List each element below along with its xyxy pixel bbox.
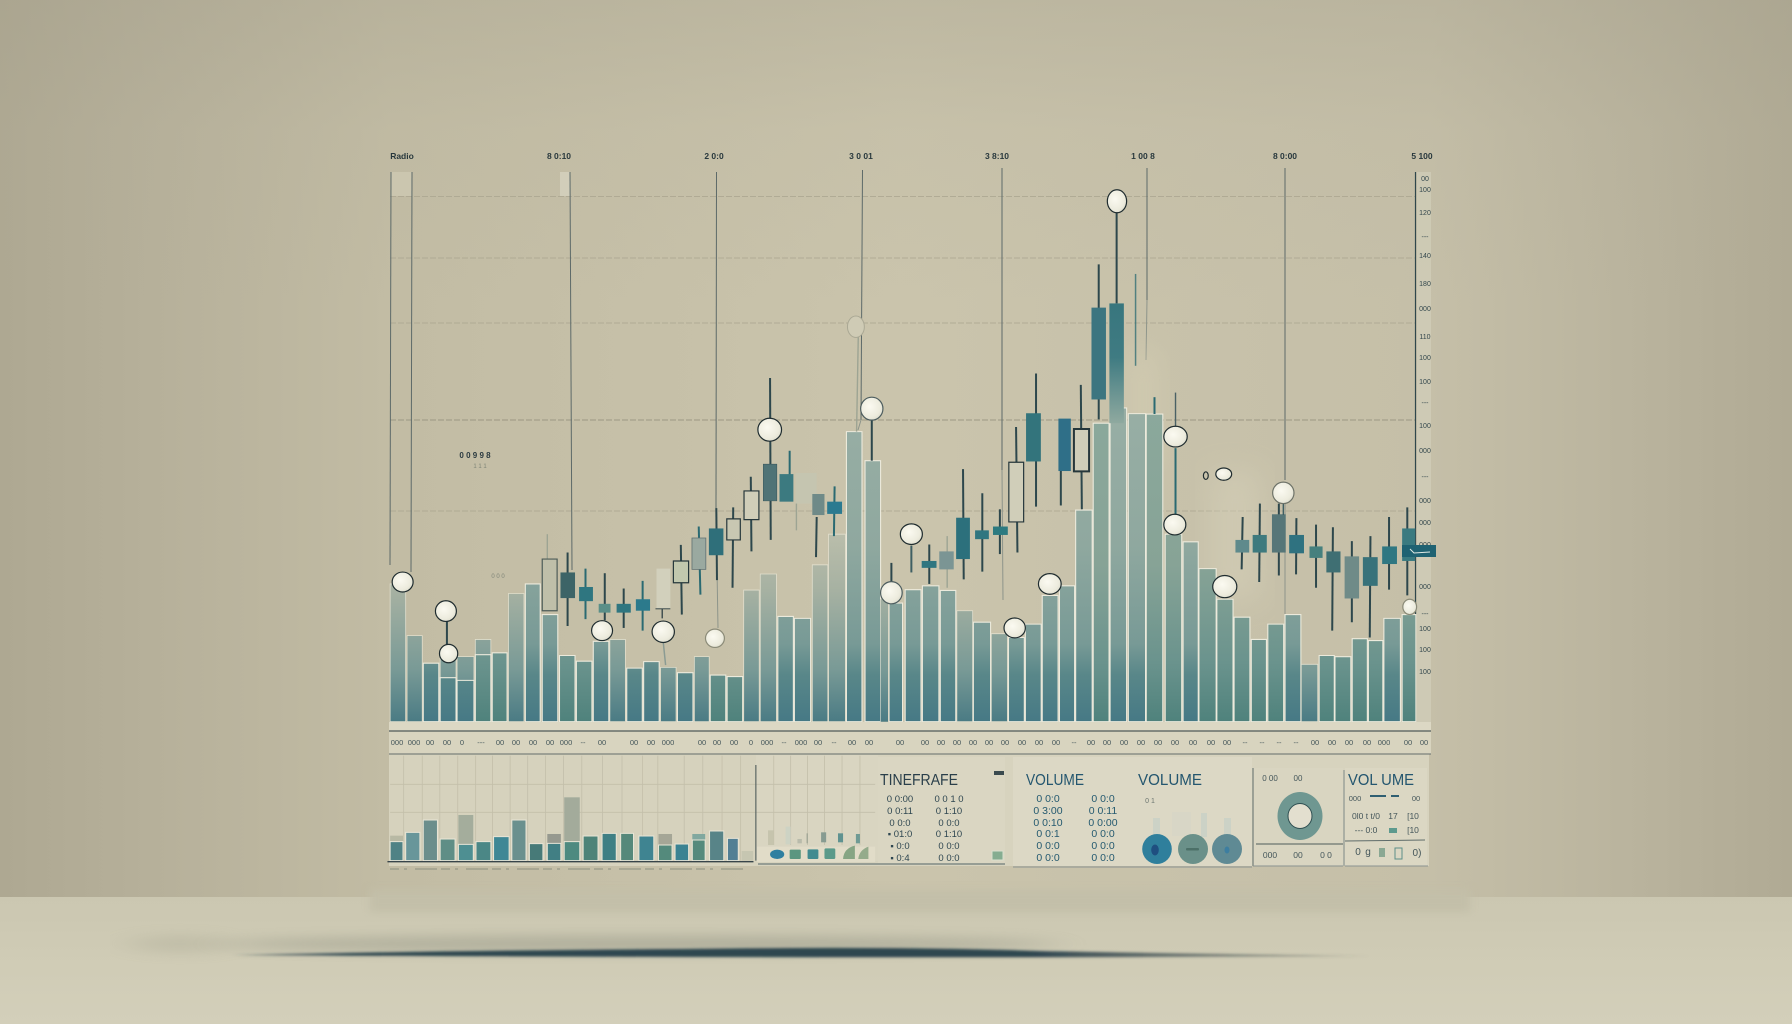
time axis strip: 00 — [512, 738, 520, 747]
time axis strip: 00 — [630, 738, 638, 747]
time axis strip: 00 — [1018, 738, 1026, 747]
main chart — [390, 151, 1436, 722]
time axis strip: 00 — [1223, 738, 1231, 747]
panel: volume table and gauges — [1013, 757, 1252, 867]
gauge dials — [1142, 834, 1242, 864]
time axis strip: 00 — [1171, 738, 1179, 747]
horizontal grid lines — [390, 196, 1415, 511]
time axis strip: 0 — [749, 738, 753, 747]
donut labels — [1262, 774, 1332, 860]
timeframe rows: 0 1:10 — [936, 806, 962, 817]
current price tag — [1402, 545, 1436, 557]
event markers — [392, 190, 1417, 665]
time axis strip: 00 — [1207, 738, 1215, 747]
time axis strip: 00 — [1087, 738, 1095, 747]
heading: timeframe: TINEFRAFE — [880, 772, 958, 789]
volume rows: 0 0:0 — [1091, 852, 1115, 864]
heading: volume right: VOLUME — [1138, 772, 1202, 789]
right price axis: 000 — [1419, 306, 1431, 313]
summary rows: [10 — [1407, 825, 1419, 835]
floating note: 1 1 1 — [473, 464, 487, 470]
time axis strip: 00 — [1363, 738, 1371, 747]
green status box — [992, 851, 1003, 860]
top time labels: 3 0 01 — [849, 151, 873, 161]
timeframe rows: 0 0:0 — [938, 853, 960, 864]
time axis strip: 00 — [1420, 738, 1428, 747]
summary rows: 00 — [1412, 794, 1420, 803]
floating note — [459, 451, 505, 580]
colour pills — [757, 846, 875, 862]
right price axis: 100 — [1419, 626, 1431, 633]
right price axis: 100 — [1419, 647, 1431, 654]
right price axis — [1416, 172, 1431, 722]
timeframe rows: 0 0 1 0 — [934, 794, 964, 805]
volume rows: 0 0:0 — [1091, 840, 1115, 852]
right price axis: 180 — [1419, 281, 1431, 288]
volume rows: 0 0:0 — [1036, 840, 1060, 852]
time axis strip: 00 — [546, 738, 554, 747]
right price axis: 100 — [1419, 379, 1431, 386]
footer tick strip — [390, 868, 745, 870]
volume rows: 0 0:1 — [1036, 828, 1060, 840]
summary rows: 17 — [1388, 811, 1398, 821]
time axis strip: 00 — [698, 738, 706, 747]
time axis strip: -- — [1294, 738, 1299, 747]
heading: volume summary: VOL UME — [1348, 772, 1414, 789]
volume rows: 0 0:0 — [1036, 793, 1060, 805]
donut labels: 000 — [1263, 850, 1277, 860]
tab icon — [994, 771, 1004, 775]
right price axis: 110 — [1419, 334, 1431, 341]
floating note: 0 0 9 9 8 — [459, 451, 491, 460]
summary icons: 0) — [1413, 848, 1421, 859]
time axis strip: 00 — [1001, 738, 1009, 747]
time axis strip: -- — [1276, 738, 1282, 747]
time axis strip: -- — [782, 738, 787, 747]
summary icons — [1355, 847, 1421, 859]
time axis strip: 00 — [1137, 738, 1145, 747]
timeframe rows: 0 0:00 — [887, 794, 913, 805]
right price axis: 000 — [1419, 542, 1431, 549]
time axis strip: -- — [1242, 738, 1248, 747]
vertical time lines — [390, 168, 1285, 630]
volume rows: 0 0:10 — [1033, 817, 1063, 829]
summary rows: 0l0 t t/0 — [1352, 811, 1380, 821]
time axis strip: 00 — [1154, 738, 1162, 747]
summary rows: --- 0:0 — [1355, 825, 1378, 835]
right price axis: 000 — [1419, 498, 1431, 505]
volume rows — [1033, 793, 1118, 864]
time axis strip: 00 — [426, 738, 434, 747]
panel: donut summary — [1253, 768, 1343, 866]
time axis strip: 0 — [460, 738, 464, 747]
small caption: 0 1 — [1145, 798, 1155, 805]
volume bars — [390, 408, 1416, 722]
time axis strip: 00 — [1189, 738, 1197, 747]
mini volume bars — [387, 797, 753, 862]
right price axis: 100 — [1419, 187, 1431, 194]
right price axis: 000 — [1419, 448, 1431, 455]
right price axis: 100 — [1419, 355, 1431, 362]
mini pale bars — [768, 827, 860, 845]
timeframe rows: 0 0:0 — [938, 841, 960, 852]
time axis strip: 00 — [953, 738, 961, 747]
volume rows: 0 0:0 — [1036, 852, 1060, 864]
floating note: 0 0 0 — [491, 574, 505, 580]
timeframe rows: ▪ 0:0 — [890, 841, 910, 852]
time axis strip: 00 — [443, 738, 451, 747]
timeframe rows: ▪ 01:0 — [888, 829, 912, 840]
top time labels: 2 0:0 — [704, 151, 724, 161]
time axis strip: 00 — [1035, 738, 1043, 747]
time axis strip: -- — [1072, 738, 1077, 747]
top time labels — [390, 151, 1433, 161]
mini chart grid — [390, 756, 875, 861]
time axis strip: 00 — [969, 738, 977, 747]
floor shadow — [130, 935, 1371, 957]
timeframe rows: 0 0:0 — [938, 818, 960, 829]
right price axis: --- — [1422, 474, 1429, 481]
top time labels: Radio — [390, 151, 414, 161]
summary rows: [10 — [1407, 811, 1419, 821]
donut labels: 00 — [1294, 774, 1303, 783]
volume rows: 0 3:00 — [1033, 805, 1063, 817]
timeframe rows — [887, 794, 964, 864]
donut labels: 0 00 — [1262, 774, 1278, 783]
time axis strip: 00 — [529, 738, 537, 747]
time axis strip: 00 — [1345, 738, 1353, 747]
right price axis: --- — [1422, 400, 1429, 407]
floor — [0, 897, 1792, 1024]
time axis strip: -- — [580, 738, 586, 747]
time axis strip: 00 — [921, 738, 929, 747]
right price axis: 100 — [1419, 423, 1431, 430]
time axis strip: 000 — [1378, 738, 1390, 747]
time axis strip: 00 — [496, 738, 504, 747]
time axis strip: 00 — [598, 738, 606, 747]
volume rows: 0 0:11 — [1089, 805, 1117, 817]
time axis strip: 00 — [1328, 738, 1336, 747]
timeframe rows: ▪ 0:4 — [890, 853, 910, 864]
donut labels: 0 0 — [1320, 850, 1332, 860]
summary rows: 000 — [1349, 794, 1361, 803]
soft haze around the tallest bars — [1125, 350, 1260, 600]
time axis strip: 00 — [730, 738, 738, 747]
volume rows: 0 0:0 — [1091, 828, 1115, 840]
right price axis: 000 — [1419, 584, 1431, 591]
right price axis: --- — [1422, 234, 1429, 241]
right price axis: --- — [1422, 611, 1429, 618]
time axis strip: 00 — [1120, 738, 1128, 747]
time axis strip — [389, 722, 1431, 754]
floor transition band — [370, 890, 1470, 912]
right price axis: 00 — [1421, 176, 1429, 183]
time axis strip: 000 — [795, 738, 807, 747]
time axis strip: 00 — [814, 738, 822, 747]
time axis strip: 00 — [713, 738, 721, 747]
panel: timeframe table — [758, 757, 1005, 864]
time axis strip: 000 — [408, 738, 420, 747]
candlesticks — [542, 213, 1415, 638]
donut labels: 00 — [1293, 850, 1303, 860]
dashboard base — [389, 754, 1429, 866]
top time labels: 8 0:00 — [1273, 151, 1297, 161]
time axis strip: 000 — [662, 738, 674, 747]
time axis strip: 00 — [865, 738, 873, 747]
time axis strip: 000 — [391, 738, 403, 747]
summary icons: g — [1365, 847, 1371, 858]
right price axis: 000 — [1419, 520, 1431, 527]
pale mini bars — [1153, 812, 1231, 838]
right price axis: 140 — [1419, 253, 1431, 260]
time axis strip: 000 — [560, 738, 572, 747]
time axis strip: 000 — [761, 738, 773, 747]
panel: mini volume chart — [387, 755, 878, 869]
heading: volume left: VOLUME — [1026, 772, 1084, 789]
timeframe rows: 0 0:11 — [887, 806, 913, 817]
time axis strip: 00 — [1311, 738, 1319, 747]
panel: volume summary — [1344, 768, 1428, 866]
time axis strip: -- — [1260, 738, 1265, 747]
right price axis: 100 — [1419, 669, 1431, 676]
time axis strip: --- — [477, 738, 485, 747]
time axis strip: 00 — [848, 738, 856, 747]
time axis strip: 00 — [647, 738, 655, 747]
volume rows: 0 0:00 — [1088, 817, 1118, 829]
time axis strip: 00 — [937, 738, 945, 747]
right price axis: 120 — [1419, 210, 1431, 217]
time axis strip: 00 — [1404, 738, 1412, 747]
donut chart — [1278, 792, 1322, 840]
top time labels: 1 00 8 — [1131, 151, 1155, 161]
top time labels: 3 8:10 — [985, 151, 1009, 161]
volume rows: 0 0:0 — [1091, 793, 1115, 805]
top time labels: 5 100 — [1411, 151, 1433, 161]
timeframe rows: 0 0:0 — [889, 818, 911, 829]
time axis strip: 00 — [896, 738, 904, 747]
time axis strip: 00 — [1103, 738, 1111, 747]
time axis strip: 00 — [1052, 738, 1060, 747]
timeframe rows: 0 1:10 — [936, 829, 962, 840]
time axis strip: -- — [832, 738, 837, 747]
top time labels: 8 0:10 — [547, 151, 571, 161]
summary icons: 0 — [1355, 847, 1361, 858]
summary rows — [1349, 794, 1420, 835]
time axis strip: 00 — [985, 738, 993, 747]
